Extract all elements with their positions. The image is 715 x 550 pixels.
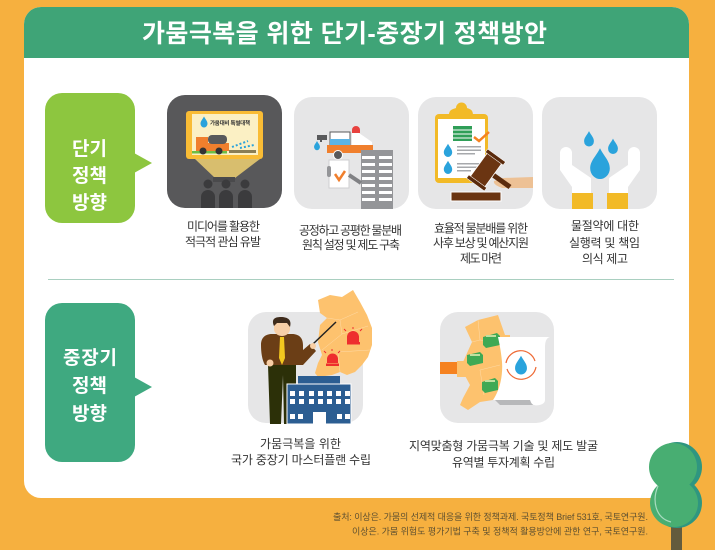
icon: media screening: 가뭄대비 특별대책 <box>210 119 250 127</box>
text: conservation caption <box>569 218 640 266</box>
text: distribution caption: 원칙 설정 및 제도 구축 <box>302 238 400 252</box>
text: master plan caption: 가뭄극복을 위한 <box>260 437 341 451</box>
icon: regional investment plan <box>440 312 554 423</box>
text: regional plan caption <box>409 439 598 470</box>
text: conservation caption: 실행력 및 책임 <box>569 235 640 250</box>
text: source note: 출처: 이상은. 가뭄의 선제적 대응을 위한 정책과제. 국토정책 Brief 531호, 국토연구원. <box>333 511 648 522</box>
text: source note <box>333 511 648 536</box>
text: compensation caption: 제도 마련 <box>460 252 502 266</box>
text: media caption: 미디어를 활용한 <box>187 220 260 234</box>
panel: mid-long term label: 방향 <box>72 403 107 425</box>
text: conservation caption: 의식 제고 <box>582 252 628 266</box>
title banner <box>24 7 689 58</box>
text: master plan caption: 국가 중장기 마스터플랜 수립 <box>231 453 371 467</box>
icon: master plan presenter <box>248 290 372 424</box>
text: distribution caption: 공정하고 공평한 물분배 <box>299 224 402 238</box>
text: compensation caption <box>433 222 529 266</box>
text: compensation caption: 효율적 물분배를 위한 <box>434 222 528 236</box>
icon: fair water distribution <box>294 97 409 209</box>
panel: mid-long term label <box>45 303 152 462</box>
text: conservation caption: 물절약에 대한 <box>571 218 639 233</box>
text: regional plan caption: 지역맞춤형 가뭄극복 기술 및 제도 발굴 <box>409 439 598 453</box>
panel: short-term label: 정책 <box>72 165 107 187</box>
icon: hands and water drops <box>542 97 657 209</box>
panel: short-term label: 단기 <box>72 138 107 160</box>
panel: mid-long term label: 정책 <box>72 375 107 397</box>
icon: compensation and gavel <box>418 97 533 209</box>
text: distribution caption <box>299 224 402 252</box>
title banner: 가뭄극복을 위한 단기-중장기 정책방안 <box>142 20 547 48</box>
text: compensation caption: 사후 보상 및 예산지원 <box>433 236 529 250</box>
text: master plan caption <box>231 437 371 467</box>
icon: media screening <box>167 95 282 208</box>
panel: short-term label <box>45 93 152 223</box>
panel: short-term label: 방향 <box>72 192 107 214</box>
text: media caption: 적극적 관심 유발 <box>185 235 261 249</box>
icon: tree <box>649 442 702 550</box>
text: regional plan caption: 유역별 투자계획 수립 <box>452 456 555 470</box>
text: media caption <box>185 220 261 249</box>
panel: mid-long term label: 중장기 <box>63 347 117 369</box>
text: source note: 이상은. 가뭄 위험도 평가기법 구축 및 정책적 활용방안에 관한 연구, 국토연구원. <box>352 526 648 536</box>
